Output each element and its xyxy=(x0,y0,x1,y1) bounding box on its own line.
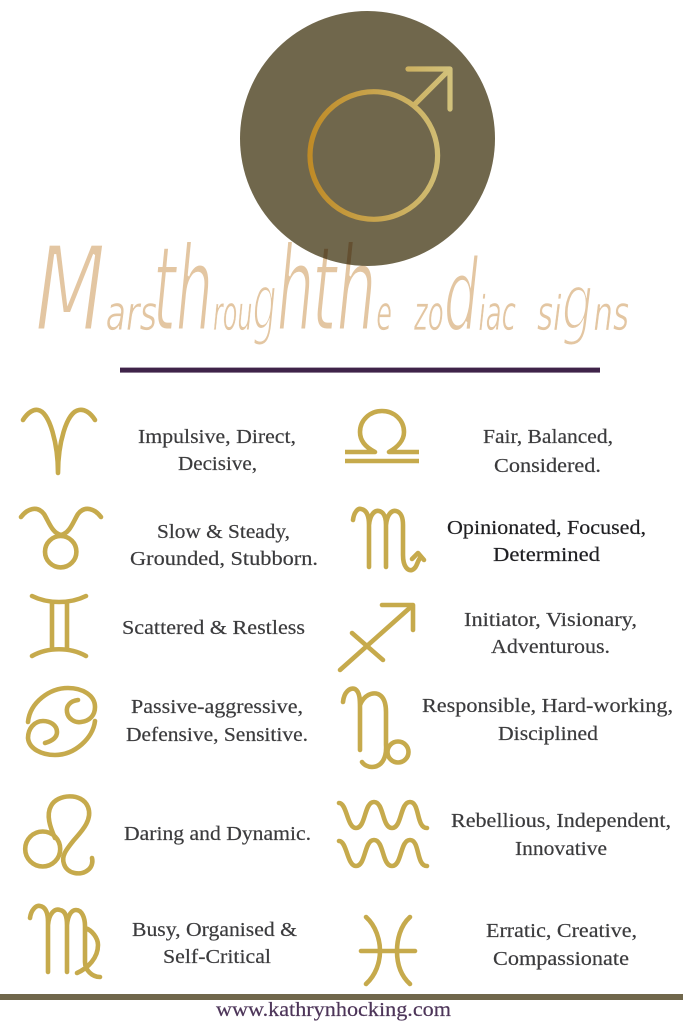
text: Sagittarius traits: Initiator, Visionary, xyxy=(464,609,637,631)
icon: Virgo xyxy=(30,906,100,977)
text: Libra traits: Fair, Balanced, xyxy=(483,426,613,448)
text: Sagittarius traits: Adventurous. xyxy=(491,636,610,658)
footer bar xyxy=(0,994,683,1000)
text: Pisces traits: Compassionate xyxy=(493,948,629,970)
planet circle with Mars symbol xyxy=(240,11,495,266)
title: the xyxy=(312,220,392,358)
footer website: www.kathrynhocking.com xyxy=(216,999,451,1021)
text: Gemini traits: Scattered & Restless xyxy=(122,617,305,639)
icon: Taurus xyxy=(21,509,101,567)
icon: Sagittarius xyxy=(340,605,413,670)
title: through xyxy=(153,220,314,358)
row: Sagittarius xyxy=(340,605,637,670)
row: Leo xyxy=(25,796,311,873)
icon: Scorpio xyxy=(353,509,424,570)
text: Capricorn traits: Responsible, Hard-working, xyxy=(422,695,673,717)
icon: Capricorn xyxy=(343,689,408,767)
icon: Aries xyxy=(23,410,95,473)
text: Leo traits: Daring and Dynamic. xyxy=(124,823,311,845)
text: Virgo traits: Self-Critical xyxy=(163,946,271,968)
text: Virgo traits xyxy=(132,919,297,968)
text: Cancer traits xyxy=(126,696,308,746)
text: Scorpio traits: Determined xyxy=(493,544,600,566)
text: Cancer traits: Passive-aggressive, xyxy=(131,696,303,718)
title: Mars xyxy=(35,220,157,358)
title xyxy=(35,220,629,358)
icon: Gemini xyxy=(32,596,86,656)
text: Aries traits: Impulsive, Direct, xyxy=(138,426,296,448)
row: Scorpio xyxy=(353,509,646,570)
icon: Cancer xyxy=(28,688,95,755)
row: Libra xyxy=(345,411,613,477)
text: Taurus traits: Grounded, Stubborn. xyxy=(130,548,318,570)
text: Libra traits: Considered. xyxy=(494,455,601,477)
text: Aquarius traits: Rebellious, Independent, xyxy=(451,810,671,832)
text: Scorpio traits xyxy=(447,517,646,566)
row: Aquarius xyxy=(339,802,671,866)
text: Pisces traits xyxy=(486,920,637,970)
text: Capricorn traits: Disciplined xyxy=(498,723,598,745)
text: Capricorn traits xyxy=(422,695,673,745)
text: Libra traits xyxy=(483,426,613,477)
icon: Pisces xyxy=(361,917,415,984)
text: Aquarius traits xyxy=(451,810,671,860)
text: Scorpio traits: Opinionated, Focused, xyxy=(447,517,646,539)
text: Aries traits: Decisive, xyxy=(178,453,257,475)
row: Capricorn xyxy=(343,689,673,767)
text: Virgo traits: Busy, Organised & xyxy=(132,919,297,941)
title: signs xyxy=(537,259,629,349)
text: Aries traits xyxy=(138,426,296,475)
title underline xyxy=(120,368,600,373)
row: Aries xyxy=(23,410,296,475)
row: Pisces xyxy=(361,917,637,984)
icon: Mars symbol xyxy=(310,69,450,219)
icon: Leo xyxy=(25,796,92,873)
text: Aquarius traits: Innovative xyxy=(515,838,607,860)
row: Virgo xyxy=(30,906,297,977)
row: Cancer xyxy=(28,688,308,755)
icon: Libra xyxy=(345,411,419,461)
icon: Aquarius xyxy=(339,802,427,866)
text: Taurus traits xyxy=(130,521,318,570)
row: Taurus xyxy=(21,509,318,570)
row: Gemini xyxy=(32,596,305,656)
text: Pisces traits: Erratic, Creative, xyxy=(486,920,637,942)
text: Taurus traits: Slow & Steady, xyxy=(157,521,290,543)
text: Cancer traits: Defensive, Sensitive. xyxy=(126,724,308,746)
title: zodiac xyxy=(413,237,516,354)
text: Sagittarius traits xyxy=(464,609,637,658)
